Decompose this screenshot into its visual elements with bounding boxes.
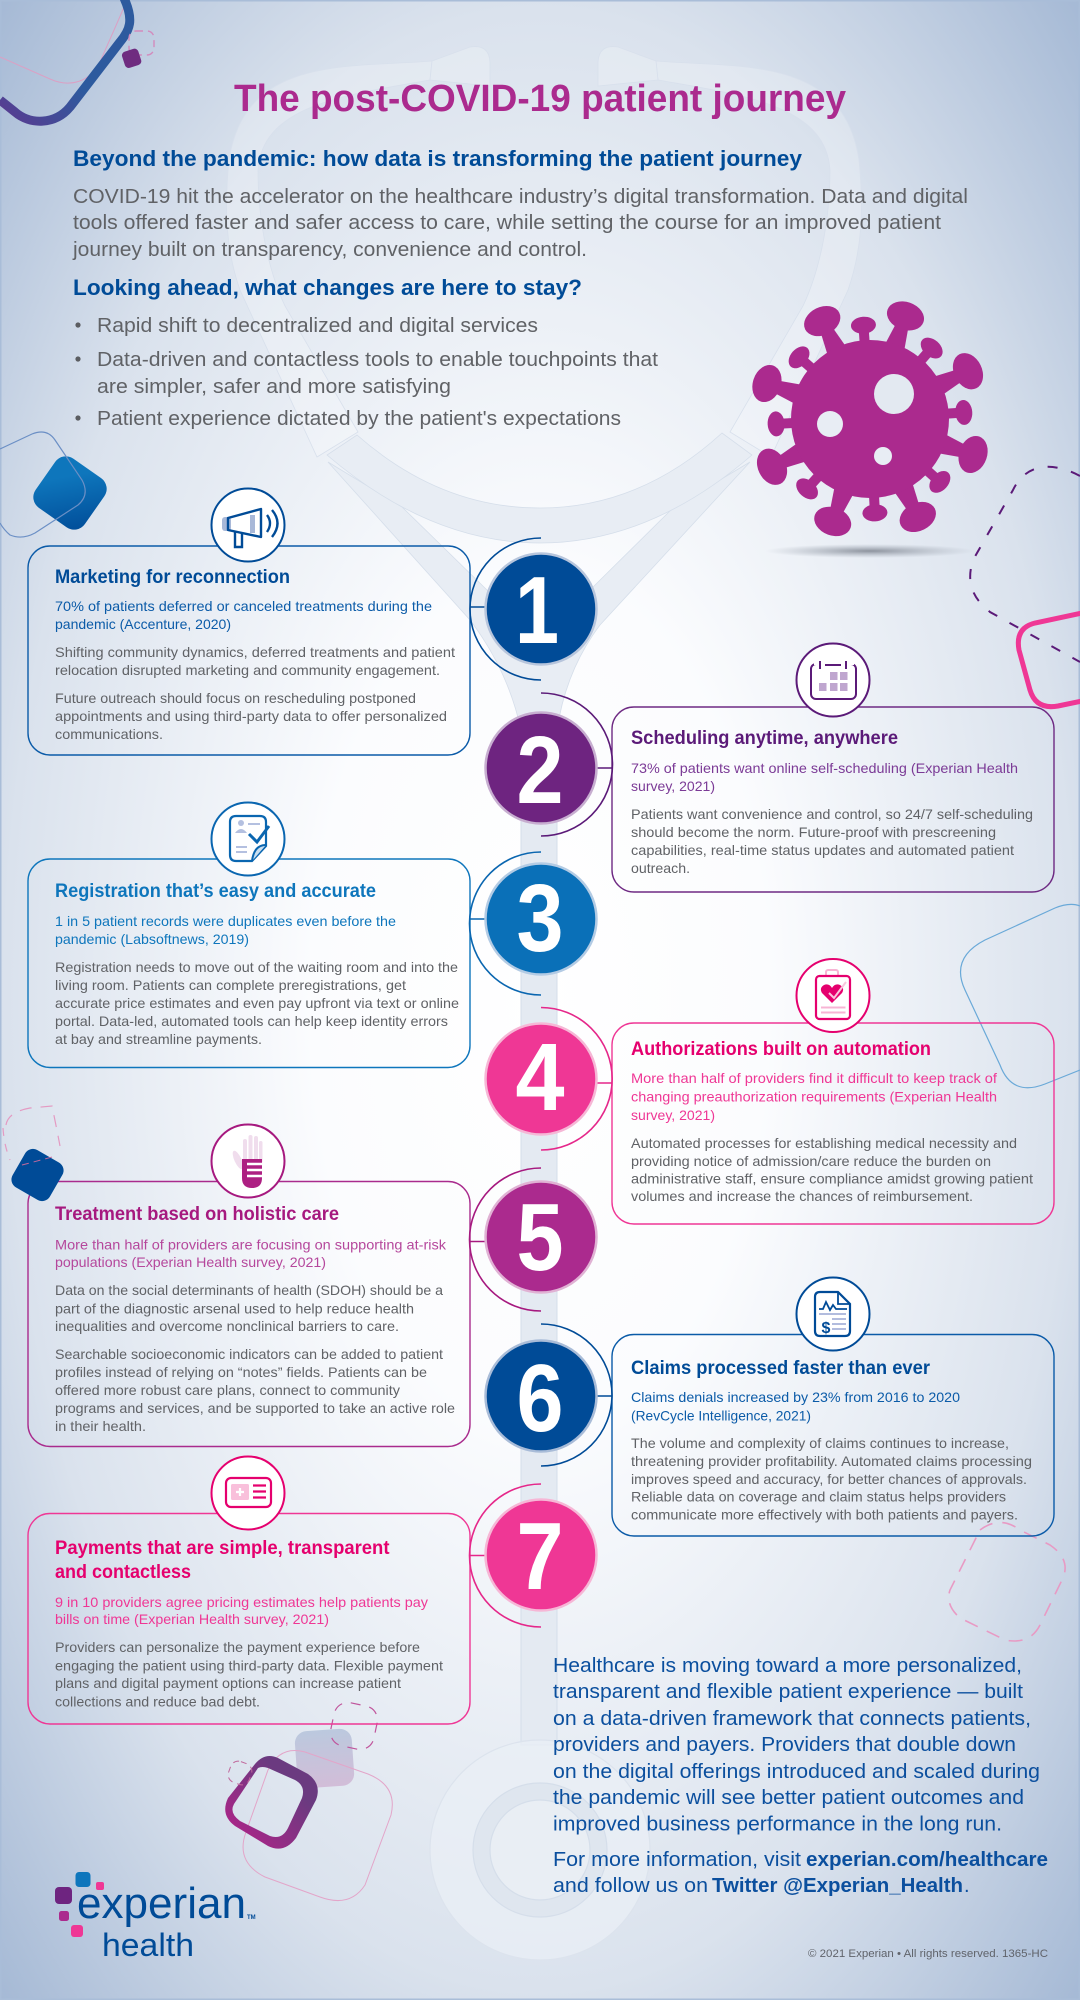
decoration: right dashed blob and pink square	[970, 467, 1080, 707]
body text: Future outreach should focus on rescheduling postponed	[55, 690, 416, 706]
body text: programs and services, and be supported to take an active role	[55, 1400, 455, 1416]
body text: offered more robust care plans, connect to community	[55, 1382, 400, 1398]
icon: calendar	[796, 644, 870, 716]
body text	[631, 1435, 1032, 1522]
body text: accurate price estimates and even pay upfront via text or online	[55, 995, 459, 1011]
intro text: tools offered faster and safer access to care, while setting the course for an improved patient	[73, 212, 941, 234]
panel: step 3 registration	[28, 802, 470, 1068]
body text	[55, 644, 455, 742]
closing text: on the digital offerings introduced and scaled during	[553, 1761, 1040, 1783]
closing text: Healthcare is moving toward a more personalized,	[553, 1655, 1022, 1677]
body text: The volume and complexity of claims continues to increase,	[631, 1435, 1009, 1451]
step number 1: 1	[515, 557, 559, 664]
body text: at bay and streamline payments.	[55, 1031, 262, 1047]
body text: improves speed and accuracy, for better chances of approvals.	[631, 1471, 1027, 1487]
decoration: right blue outline	[960, 904, 1080, 1088]
step number 6: 6	[516, 1345, 564, 1452]
closing text: on a data-driven framework that connects patients,	[553, 1708, 1031, 1730]
bullet list: are simpler, safer and more satisfying	[97, 376, 451, 398]
statistic: changing preauthorization requirements (Experian Health	[631, 1088, 997, 1104]
step number 2: 2	[516, 717, 564, 824]
statistic: 70% of patients deferred or canceled treatments during the	[55, 598, 432, 614]
heading: treatment: Treatment based on holistic care	[55, 1204, 339, 1225]
statistic: More than half of providers are focusing on supporting at-risk	[55, 1236, 447, 1252]
icon: hand with sleeve	[212, 1124, 284, 1198]
call to action: Twitter @Experian_Health	[712, 1875, 963, 1897]
step number 2	[486, 693, 612, 836]
step number 7: 7	[516, 1503, 564, 1610]
body text: Registration needs to move out of the waiting room and into the	[55, 959, 458, 975]
body text: capabilities, real-time status updates and automated patient	[631, 842, 1014, 858]
bullet list: Data-driven and contactless tools to enable touchpoints that	[97, 349, 658, 371]
icon: virus	[748, 297, 992, 558]
step number 1	[470, 538, 596, 680]
heading: payments: Payments that are simple, transparent	[55, 1538, 390, 1559]
step number 3	[470, 852, 596, 995]
statistic: survey, 2021)	[631, 1107, 715, 1123]
step number 5: 5	[516, 1184, 564, 1291]
step number 7	[470, 1484, 596, 1627]
body text: Automated processes for establishing medical necessity and	[631, 1135, 1017, 1151]
heading: authorizations: Authorizations built on automation	[631, 1039, 931, 1060]
body text: Reliable data on coverage and claim status helps providers	[631, 1488, 1006, 1504]
heading: payments: and contactless	[55, 1562, 191, 1583]
body text: communications.	[55, 726, 163, 742]
decoration: lower-right pink dashed blob	[949, 1522, 1065, 1641]
intro text	[72, 186, 968, 261]
body text: Searchable socioeconomic indicators can be added to patient	[55, 1346, 443, 1362]
body text: plans and digital payment options can increase patient	[55, 1675, 401, 1691]
body text: engaging the patient using third-party data. Flexible payment	[55, 1658, 443, 1674]
call to action	[553, 1849, 1048, 1897]
panel: step 6 claims	[612, 1278, 1054, 1536]
step number 3: 3	[516, 865, 564, 972]
body text: communicate more effectively with both patients and payers.	[631, 1506, 1018, 1522]
statistic: pandemic (Labsoftnews, 2019)	[55, 931, 249, 947]
body text	[55, 959, 459, 1047]
body text: relocation disrupted marketing and community engagement.	[55, 662, 440, 678]
icon: claim document: $	[822, 1320, 831, 1337]
statistic	[631, 760, 1018, 794]
body text: collections and reduce bad debt.	[55, 1694, 260, 1710]
icon: clipboard with heart	[796, 959, 870, 1032]
body text: in their health.	[55, 1418, 146, 1434]
logo: experian health: TM	[247, 1915, 256, 1921]
copyright: © 2021 Experian • All rights reserved. 1365-HC	[808, 1948, 1048, 1960]
call to action: .	[964, 1875, 970, 1897]
statistic: survey, 2021)	[631, 778, 715, 794]
step number 4	[486, 1008, 612, 1150]
body text: inequalities and overcome nonclinical barriers to care.	[55, 1318, 399, 1334]
panel: step 2 scheduling	[612, 644, 1054, 892]
step number 5	[470, 1168, 596, 1311]
body text: portal. Data-led, automated tools can help keep identity errors	[55, 1013, 448, 1029]
statistic	[631, 1070, 997, 1123]
bullet list: Patient experience dictated by the patient's expectations	[97, 408, 621, 430]
heading: registration: Registration that’s easy and accurate	[55, 881, 376, 902]
body text: threatening provider profitability. Automated claims processing	[631, 1453, 1032, 1469]
body text: profiles instead of relying on “notes” fields. Patients can be	[55, 1364, 427, 1380]
icon: megaphone	[212, 488, 284, 562]
intro text: journey built on transparency, convenience and control.	[72, 239, 587, 261]
body text	[631, 806, 1033, 876]
statistic: bills on time (Experian Health survey, 2021)	[55, 1611, 329, 1627]
statistic	[631, 1389, 960, 1424]
closing text	[553, 1655, 1040, 1836]
body text: living room. Patients can complete preregistrations, get	[55, 977, 406, 993]
body text: appointments and using third-party data to offer personalized	[55, 708, 447, 724]
body text: Providers can personalize the payment experience before	[55, 1639, 420, 1655]
icon: registration document	[212, 802, 284, 876]
panel: step 5 treatment	[28, 1124, 470, 1446]
body text: Data on the social determinants of health (SDOH) should be a	[55, 1282, 443, 1298]
statistic: Claims denials increased by 23% from 2016 to 2020	[631, 1389, 960, 1405]
statistic: 73% of patients want online self-scheduling (Experian Health	[631, 760, 1018, 776]
decoration: top-left stethoscope curve	[0, 0, 154, 121]
body text	[55, 1282, 455, 1434]
call to action: and follow us on	[553, 1875, 708, 1897]
logo: experian health	[55, 1872, 256, 1963]
icon: claim document	[796, 1278, 870, 1350]
heading: scheduling anytime: Scheduling anytime, anywhere	[631, 728, 898, 749]
statistic	[55, 1594, 428, 1627]
icon: payment card	[212, 1456, 284, 1530]
closing text: the pandemic will see better patient outcomes and	[553, 1787, 1024, 1809]
heading: looking ahead: Looking ahead, what changes are here to stay?	[73, 275, 582, 300]
closing text: transparent and flexible patient experience — built	[553, 1681, 1023, 1703]
body text: should become the norm. Future-proof with prescreening	[631, 824, 996, 840]
logo: experian health: health	[102, 1927, 194, 1963]
decoration: left navy square	[3, 1106, 67, 1204]
statistic: More than half of providers find it difficult to keep track of	[631, 1070, 997, 1086]
step number 4: 4	[516, 1024, 564, 1131]
logo: experian health: experian	[77, 1879, 246, 1928]
body text: outreach.	[631, 860, 690, 876]
background stethoscope	[227, 47, 861, 1960]
statistic	[55, 1236, 447, 1270]
body text: Patients want convenience and control, so 24/7 self-scheduling	[631, 806, 1033, 822]
bullet list: Rapid shift to decentralized and digital services	[97, 315, 538, 337]
panel: step 7 payments	[28, 1456, 470, 1724]
intro text: COVID-19 hit the accelerator on the healthcare industry’s digital transformation. Data and digital	[73, 186, 968, 208]
title: The post-COVID-19 patient journey	[234, 78, 846, 120]
heading: marketing for reconnection: Marketing for reconnection	[55, 567, 290, 588]
step number 6	[486, 1324, 612, 1466]
body text	[631, 1135, 1033, 1204]
body text: Shifting community dynamics, deferred treatments and patient	[55, 644, 455, 660]
closing text: providers and payers. Providers that double down	[553, 1734, 1016, 1756]
panel: step 4 authorizations	[612, 959, 1054, 1224]
statistic: populations (Experian Health survey, 2021)	[55, 1254, 326, 1270]
body text: part of the diagnostic arsenal used to help reduce health	[55, 1300, 414, 1316]
closing text: improved business performance in the long run.	[553, 1814, 1002, 1836]
heading: claims: Claims processed faster than ever	[631, 1358, 931, 1379]
statistic	[55, 598, 432, 632]
bullet list	[75, 315, 658, 430]
statistic: pandemic (Accenture, 2020)	[55, 616, 231, 632]
statistic	[55, 913, 396, 947]
statistic: 9 in 10 providers agree pricing estimates help patients pay	[55, 1594, 428, 1610]
heading: payments	[55, 1538, 390, 1583]
call to action: experian.com/healthcare	[806, 1849, 1048, 1871]
statistic: 1 in 5 patient records were duplicates even before the	[55, 913, 396, 929]
body text: providing notice of admission/care reduce the burden on	[631, 1153, 991, 1169]
heading: beyond the pandemic: Beyond the pandemic: how data is transforming the patient journey	[73, 146, 803, 171]
panel: step 1 marketing	[28, 488, 470, 755]
decoration: left blue square	[0, 432, 112, 537]
call to action: For more information, visit	[553, 1849, 801, 1871]
decoration: bottom squares	[225, 1700, 392, 1901]
body text: administrative staff, ensure compliance amidst growing patient	[631, 1170, 1033, 1186]
body text: volumes and increase the chances of reimbursement.	[631, 1188, 973, 1204]
body text	[55, 1639, 443, 1710]
statistic: (RevCycle Intelligence, 2021)	[631, 1408, 811, 1424]
